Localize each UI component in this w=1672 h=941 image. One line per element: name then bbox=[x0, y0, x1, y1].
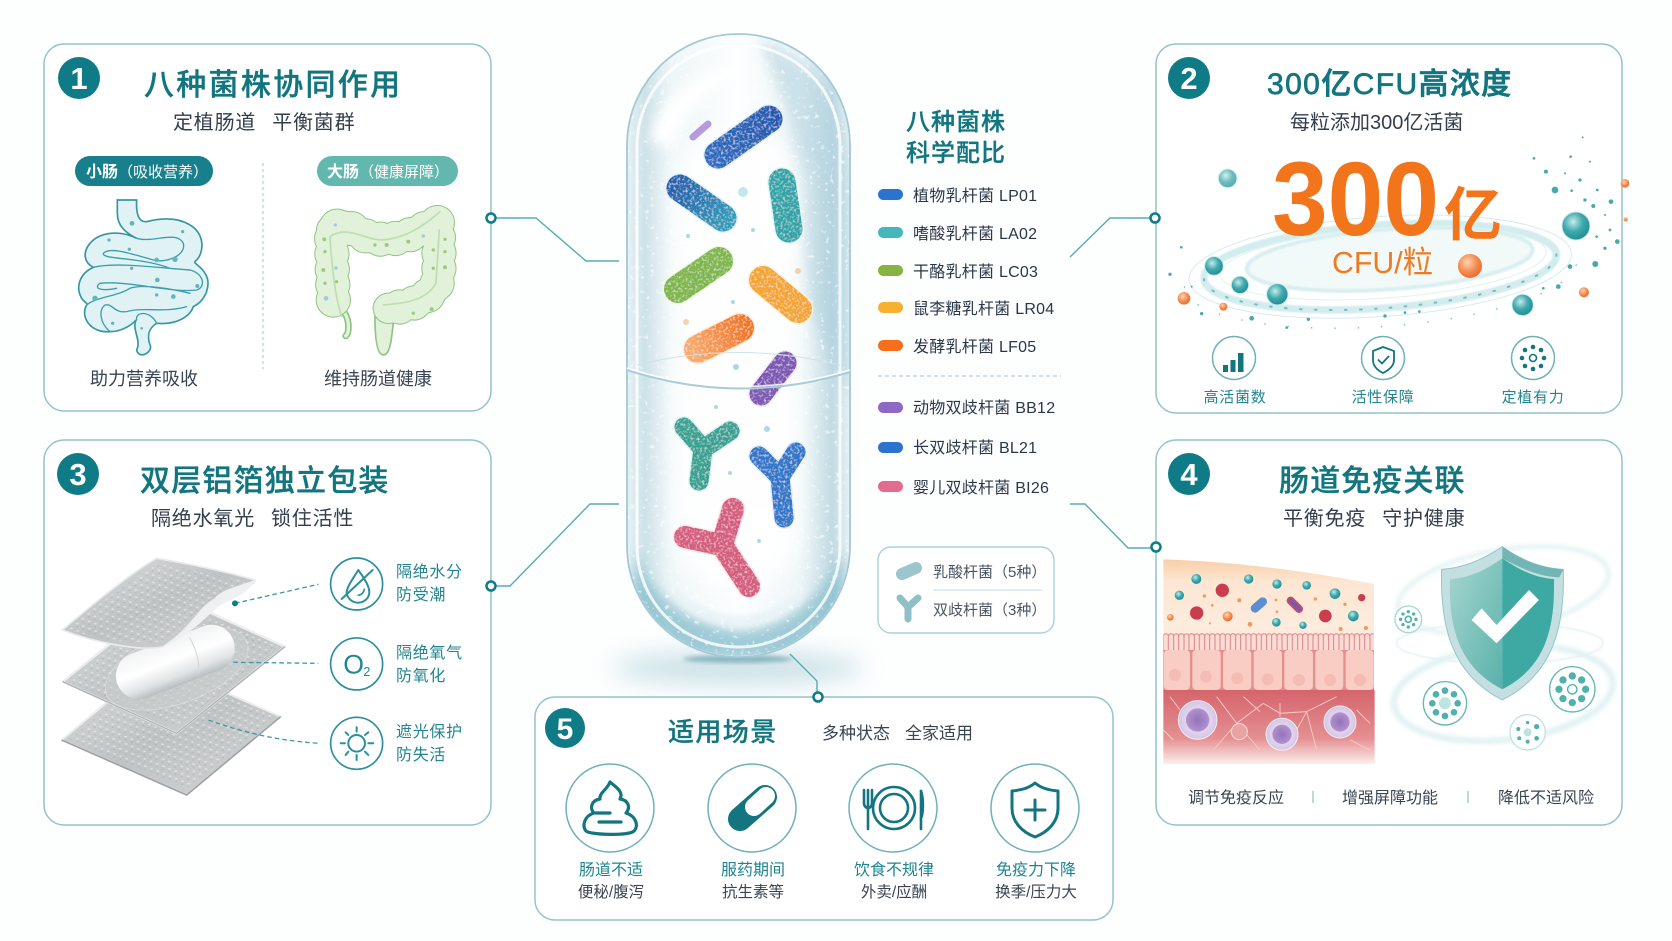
badge 1: 1 bbox=[70, 61, 88, 96]
strain LA02: 嗜酸乳杆菌 LA02 bbox=[913, 225, 1037, 243]
badge 3 bbox=[57, 453, 99, 495]
panel 2: 30 billion CFU bbox=[1150, 44, 1629, 413]
big number 300: 300 bbox=[1272, 141, 1439, 258]
icon: stool bbox=[584, 782, 636, 834]
key text bbox=[933, 564, 1046, 619]
rod: purple bbox=[761, 363, 785, 394]
key icon: rod bbox=[902, 568, 916, 574]
panel 4: gut immunity bbox=[1152, 440, 1622, 825]
icon: oxygen bbox=[331, 638, 383, 690]
caption: 外卖/应酬 bbox=[861, 882, 927, 901]
foil top layer bbox=[60, 557, 260, 653]
connector node bbox=[486, 214, 496, 222]
label: 高活菌数 bbox=[1204, 389, 1266, 406]
subheading: 定植肠道 平衡菌群 bbox=[173, 111, 355, 134]
tiny particles in capsule bbox=[683, 187, 801, 543]
icon: oxygen: O bbox=[343, 649, 364, 679]
label: 定植有力 bbox=[1502, 389, 1564, 406]
subheading: 每粒添加300亿活菌 bbox=[1290, 111, 1463, 134]
icon: oxygen: 2 bbox=[363, 665, 370, 679]
Y bacterium: pink bbox=[685, 509, 749, 586]
panel 1: strain synergy bbox=[44, 44, 496, 411]
rod: blue bbox=[718, 119, 769, 155]
badge 4 bbox=[1168, 453, 1210, 495]
heading: 双层铝箔独立包装 bbox=[140, 465, 390, 498]
CFU per capsule: CFU/粒 bbox=[1332, 245, 1433, 280]
badge 4: 4 bbox=[1180, 457, 1198, 492]
caption bbox=[854, 861, 934, 901]
scenario: low immunity bbox=[991, 764, 1079, 901]
connector: capsule to panel 5 bbox=[790, 654, 817, 697]
icon: colonization bbox=[1512, 336, 1554, 380]
illustration: shield and swirl bbox=[1389, 532, 1618, 751]
callout lines bbox=[208, 584, 318, 743]
badge 5: 5 bbox=[557, 713, 573, 746]
panel 5: applicable scenarios bbox=[535, 692, 1113, 920]
badge 3: 3 bbox=[69, 457, 87, 492]
strain LP01: 植物乳杆菌 LP01 bbox=[913, 187, 1037, 205]
caption: 肠道不适 bbox=[579, 861, 643, 879]
label: moisture barrier bbox=[396, 563, 463, 604]
scenario: irregular diet bbox=[849, 764, 937, 901]
icon: sun bbox=[331, 717, 383, 769]
badge 1 bbox=[58, 57, 100, 99]
benefit: regulate immune response: 调节免疫反应 bbox=[1188, 788, 1284, 807]
label: moisture barrier: 隔绝水分 bbox=[396, 563, 463, 581]
rod: yellow orange bbox=[763, 280, 798, 309]
label: oxygen barrier: 防氧化 bbox=[396, 667, 446, 685]
pill: large intestine bbox=[317, 156, 458, 186]
heading: 300亿CFU高浓度 bbox=[1267, 68, 1513, 101]
label: 活性保障 bbox=[1352, 388, 1414, 406]
capsule illustration bbox=[613, 34, 863, 685]
connector node bbox=[486, 582, 496, 590]
caption: 免疫力下降 bbox=[996, 861, 1076, 879]
Y bacterium: teal bbox=[684, 427, 730, 481]
legend heading: 科学配比 bbox=[906, 140, 1006, 167]
connector: panel 1 to capsule bbox=[491, 218, 619, 261]
illustration: foil layers with capsule bbox=[60, 557, 383, 797]
small lilac bacterium bbox=[693, 124, 708, 137]
key text: 乳酸杆菌（5种） bbox=[933, 564, 1046, 581]
benefit: lower discomfort: 降低不适风险 bbox=[1498, 789, 1594, 807]
label: moisture barrier: 防受潮 bbox=[396, 586, 446, 604]
strain LR04: 鼠李糖乳杆菌 LR04 bbox=[913, 300, 1054, 318]
icon: large intestine bbox=[321, 212, 447, 355]
caption: 服药期间 bbox=[721, 861, 785, 879]
rod: orange bbox=[698, 328, 740, 349]
heading: 适用场景 bbox=[668, 717, 778, 747]
icon: small intestine bbox=[79, 200, 208, 355]
pill: large intestine: 大肠（健康屏障） bbox=[327, 163, 449, 181]
icon: shield plus bbox=[1012, 783, 1058, 837]
caption bbox=[995, 861, 1077, 901]
microbe medallions bbox=[1395, 606, 1595, 750]
badge 2 bbox=[1168, 57, 1210, 99]
scenario: gut discomfort bbox=[566, 764, 654, 901]
rod: blue teal bbox=[680, 188, 723, 218]
legend heading: 八种菌株 bbox=[906, 109, 1006, 136]
connector node bbox=[814, 692, 822, 702]
rod: teal bbox=[782, 182, 789, 229]
label: oxygen barrier bbox=[396, 644, 463, 685]
Y bacterium: blue bbox=[759, 452, 796, 518]
caption: 饮食不规律 bbox=[854, 861, 934, 879]
caption: small intestine: 助力营养吸收 bbox=[90, 369, 198, 389]
immune cells bbox=[1178, 701, 1356, 750]
type key box bbox=[878, 547, 1054, 633]
unit: 亿 bbox=[1444, 183, 1502, 248]
pill: small intestine bbox=[75, 156, 213, 186]
label: light barrier bbox=[396, 723, 463, 764]
legend heading bbox=[906, 109, 1006, 167]
strain BL21: 长双歧杆菌 BL21 bbox=[913, 439, 1037, 457]
benefit: strengthen barrier: 增强屏障功能 bbox=[1342, 789, 1438, 807]
subheading: 隔绝水氧光 锁住活性 bbox=[151, 507, 354, 530]
icon: high activity count bbox=[1212, 336, 1256, 380]
strain LC03: 干酪乳杆菌 LC03 bbox=[913, 263, 1038, 281]
connector: panel 3 to capsule bbox=[491, 504, 619, 586]
panel 3: aluminium foil packaging bbox=[44, 440, 496, 825]
badge 5 bbox=[545, 708, 585, 748]
spheres: orange bbox=[1178, 179, 1629, 311]
subheading: 平衡免疫 守护健康 bbox=[1283, 507, 1465, 530]
lactobacillus rods bbox=[678, 119, 798, 394]
caption: large intestine: 维持肠道健康 bbox=[324, 369, 432, 389]
subheading: 多种状态 全家适用 bbox=[822, 724, 973, 743]
pill: small intestine: 小肠（吸收营养） bbox=[86, 163, 208, 181]
illustration: intestinal tissue bbox=[1163, 559, 1375, 764]
caption: 便秘/腹泻 bbox=[578, 883, 644, 901]
shield bbox=[1441, 547, 1563, 700]
rod: green bbox=[678, 261, 719, 289]
epithelial cells bbox=[1164, 650, 1374, 690]
key text: 双歧杆菌（3种） bbox=[933, 602, 1046, 619]
badge 2: 2 bbox=[1180, 61, 1198, 96]
label: light barrier: 防失活 bbox=[396, 746, 446, 764]
label: light barrier: 遮光保护 bbox=[396, 723, 463, 741]
bifidobacteria Y shapes bbox=[684, 427, 796, 586]
capsule seam bbox=[627, 352, 850, 389]
scenario: on medication bbox=[708, 764, 796, 901]
caption: 抗生素等 bbox=[722, 883, 784, 901]
label: oxygen barrier: 隔绝氧气 bbox=[396, 644, 463, 662]
spheres: teal bbox=[1205, 169, 1590, 316]
capsule shadow bbox=[613, 651, 863, 685]
swirl of particles bbox=[1168, 136, 1629, 340]
connector node bbox=[1150, 214, 1160, 222]
caption: 换季/压力大 bbox=[995, 883, 1077, 901]
microbes above tissue bbox=[1167, 574, 1365, 629]
caption bbox=[578, 861, 644, 901]
icon: activity guarantee bbox=[1362, 336, 1404, 380]
icon: plate and cutlery bbox=[864, 787, 923, 829]
foil middle layer bbox=[62, 612, 286, 734]
heading: 肠道免疫关联 bbox=[1279, 465, 1466, 498]
white capsule bbox=[109, 618, 242, 706]
icon: no moisture bbox=[331, 558, 383, 610]
legend: eight strains bbox=[878, 109, 1061, 633]
key icon: Y bbox=[900, 598, 918, 619]
connector: panel 4 to legend bbox=[1070, 504, 1155, 548]
strain BI26: 婴儿双歧杆菌 BI26 bbox=[913, 479, 1049, 497]
heading: 八种菌株协同作用 bbox=[144, 69, 402, 102]
capsule shell bbox=[627, 34, 850, 660]
caption bbox=[721, 861, 785, 901]
foil bottom layer bbox=[60, 693, 282, 796]
strain BB12: 动物双歧杆菌 BB12 bbox=[913, 399, 1055, 417]
icon: pill bbox=[740, 796, 766, 819]
strain LF05: 发酵乳杆菌 LF05 bbox=[913, 338, 1036, 356]
connector: panel 2 to legend bbox=[1070, 218, 1155, 257]
connector node bbox=[1152, 542, 1160, 552]
